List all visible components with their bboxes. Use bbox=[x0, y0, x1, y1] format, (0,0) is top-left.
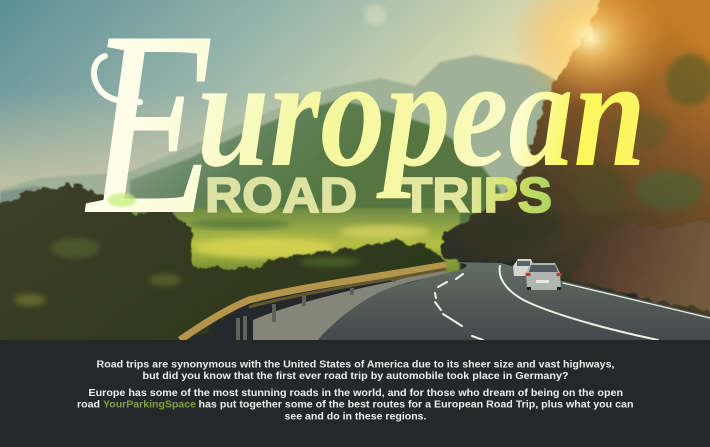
road bbox=[318, 262, 710, 340]
right hillside forest bbox=[443, 0, 710, 325]
title words: ROAD TRIPS: ROAD bbox=[205, 169, 357, 223]
intro paragraph 2 bbox=[77, 388, 634, 422]
panel: intro text bbox=[0, 340, 710, 447]
intro paragraph 2: has put together some of the best routes for a European Road Trip, plus what you can bbox=[198, 400, 634, 410]
rock face bbox=[572, 218, 710, 315]
title words: ROAD TRIPS bbox=[205, 169, 552, 223]
intro paragraph 1: but did you know that the first ever road trip by automobile took place in Germany? bbox=[142, 371, 568, 382]
intro paragraph 1: Road trips are synonymous with the United States of America due to its sheer size and vast highways, bbox=[96, 360, 615, 370]
front silver car bbox=[526, 263, 562, 290]
road markings bbox=[435, 266, 710, 340]
gravel verge bbox=[253, 268, 446, 340]
left foreground trees bbox=[0, 185, 445, 345]
distant mountains bbox=[0, 54, 557, 225]
intro paragraph 2: road bbox=[77, 400, 100, 410]
intro paragraph 2: see and do in these regions. bbox=[284, 412, 427, 422]
highlighted brand name: YourParkingSpace bbox=[103, 400, 196, 410]
sky bbox=[0, 0, 601, 204]
sunlight glow bbox=[516, 0, 661, 103]
valley fields bbox=[120, 208, 460, 280]
cloud bbox=[365, 5, 387, 25]
panel: landscape photo background bbox=[0, 0, 710, 345]
title bbox=[85, 0, 646, 268]
guardrail bbox=[180, 265, 446, 340]
title words: ROAD TRIPS: TRIPS bbox=[401, 169, 552, 223]
flourish of the capital letter bbox=[94, 56, 140, 102]
intro paragraph 1 bbox=[96, 360, 615, 382]
green tint on the capital letter bbox=[108, 193, 136, 207]
title word: European bbox=[85, 0, 646, 268]
highlights on left trees bbox=[14, 238, 360, 306]
forest green patches bbox=[480, 54, 710, 243]
rear car bbox=[513, 259, 534, 276]
intro paragraph 2: Europe has some of the most stunning roads in the world, and for those who dream of being on the open bbox=[88, 388, 623, 399]
